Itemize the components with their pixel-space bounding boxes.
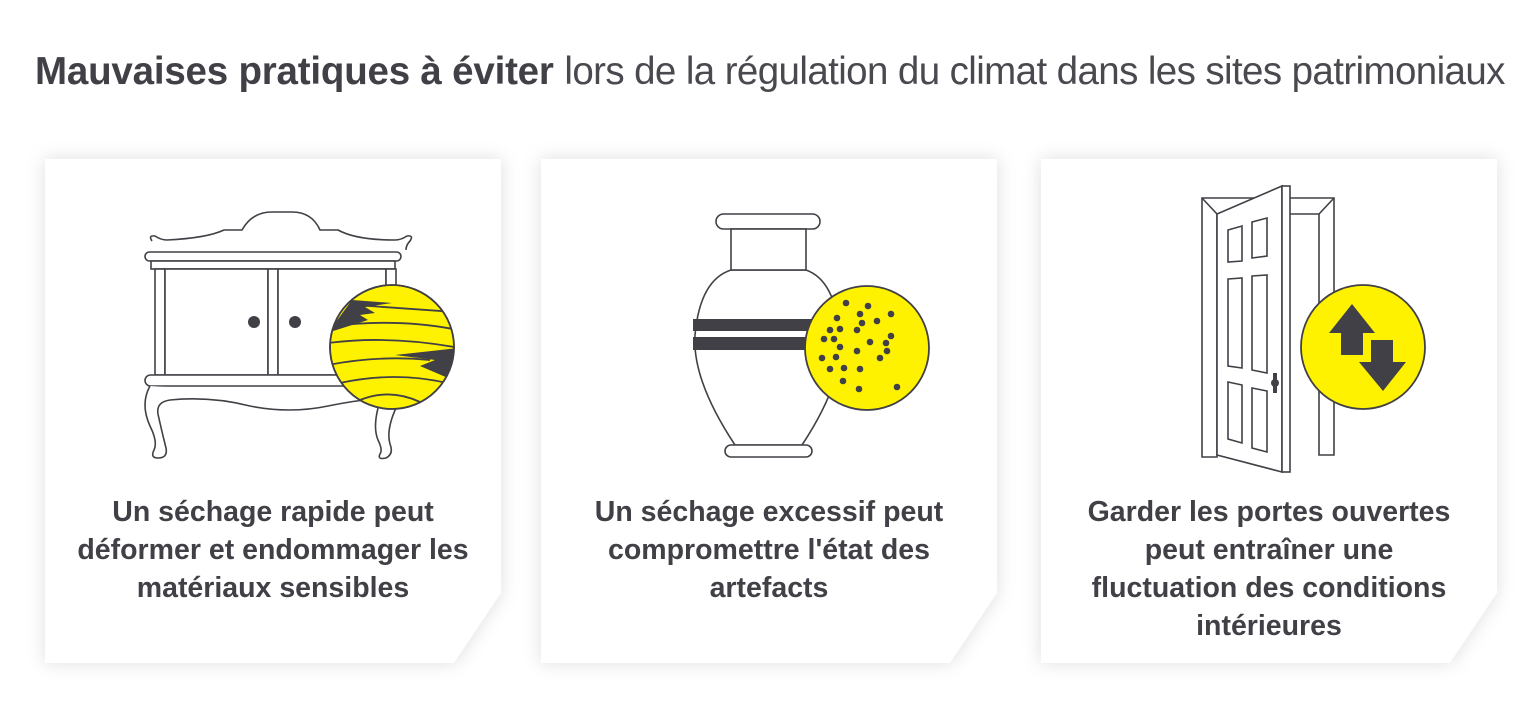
text: excessive drying: compromettre l'état des bbox=[608, 534, 930, 566]
icon: dotted circle bbox=[805, 286, 929, 410]
text: rapid drying: Un séchage rapide peut bbox=[112, 496, 434, 528]
text: open doors: peut entraîner une bbox=[1145, 534, 1393, 566]
text: rapid drying: matériaux sensibles bbox=[137, 572, 409, 604]
panel: excessive drying bbox=[535, 153, 1003, 669]
text: rapid drying: déformer et endommager les bbox=[77, 534, 469, 566]
icon: up-down arrows circle bbox=[1301, 285, 1425, 409]
text: excessive drying: artefacts bbox=[710, 572, 828, 604]
panel: rapid drying bbox=[39, 153, 507, 669]
text: open doors: fluctuation des conditions bbox=[1092, 572, 1446, 604]
icon: vase bbox=[693, 214, 841, 457]
text: open doors: intérieures bbox=[1196, 610, 1342, 642]
icon: cabinet bbox=[145, 212, 411, 458]
text: open doors: Garder les portes ouvertes bbox=[1088, 496, 1450, 528]
icon: cracked wood circle bbox=[328, 285, 460, 409]
text: rapid drying bbox=[77, 496, 469, 604]
panel: open doors bbox=[1035, 153, 1503, 669]
text: excessive drying: Un séchage excessif peut bbox=[595, 496, 943, 528]
text: excessive drying bbox=[595, 496, 943, 604]
text: open doors bbox=[1088, 496, 1450, 642]
icon: open door bbox=[1202, 186, 1334, 472]
title: Mauvaises pratiques à éviter lors de la régulation du climat dans les sites patrimoniaux bbox=[35, 50, 1505, 93]
